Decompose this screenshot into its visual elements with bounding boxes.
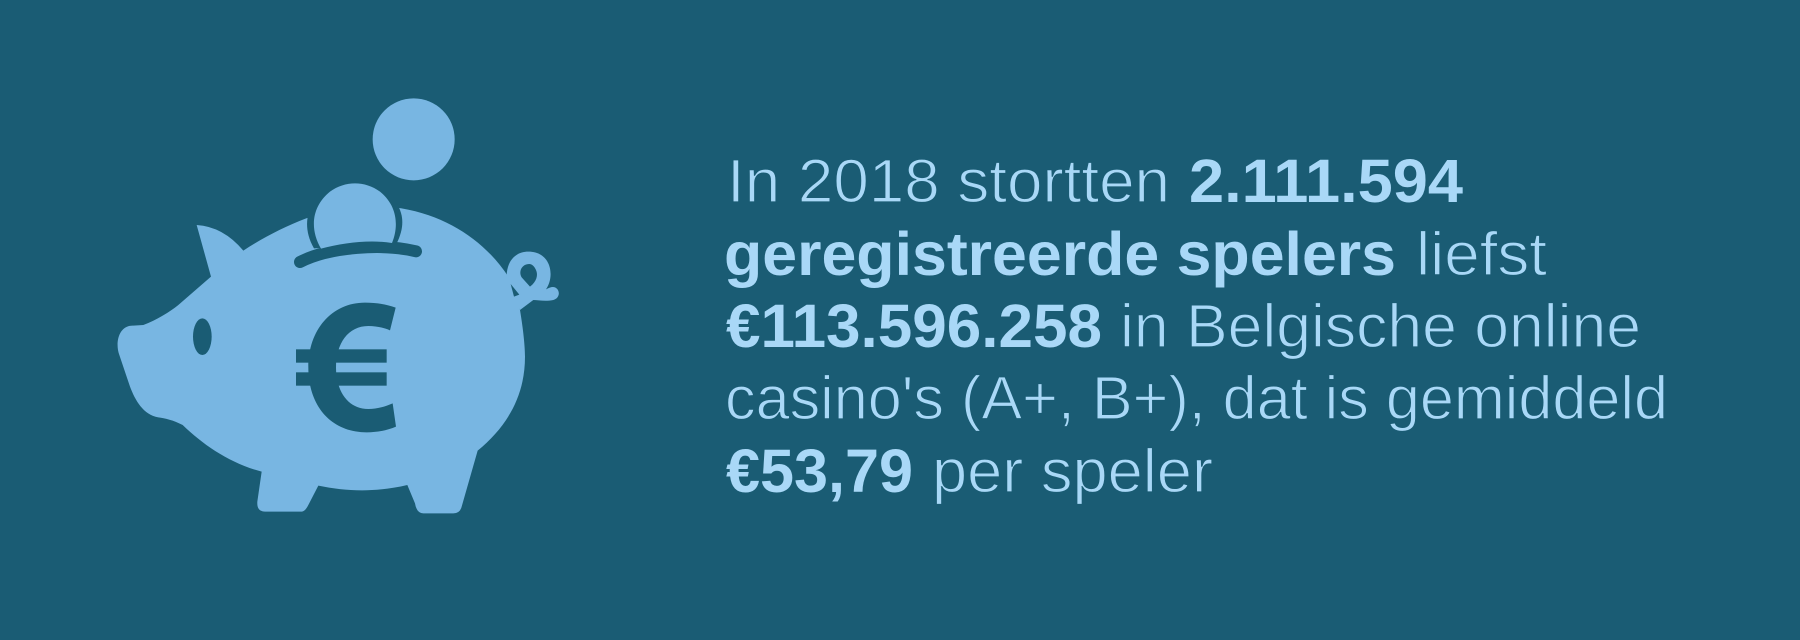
icon: pig body	[118, 206, 525, 513]
line 1: 2.111.594	[1189, 147, 1463, 215]
line 5: per speler	[932, 437, 1213, 505]
text block: statistics	[724, 147, 1668, 505]
line 2: geregistreerde spelers	[724, 220, 1396, 288]
line 4: casino's (A+, B+), dat is gemiddeld	[725, 364, 1668, 432]
icon: euro sign	[296, 303, 396, 432]
line 1: In 2018 stortten	[727, 147, 1170, 215]
line 3	[726, 292, 1641, 360]
line 2: liefst	[1416, 220, 1547, 288]
line 3: in Belgische online	[1120, 292, 1641, 360]
icon: piggy bank with coins	[118, 98, 559, 513]
icon: pig eye	[193, 318, 212, 355]
line 1	[727, 147, 1463, 215]
icon: tail hole	[511, 264, 537, 297]
icon: coin slot	[300, 247, 416, 262]
icon: coin ring	[307, 203, 402, 248]
line 3: €113.596.258	[726, 292, 1102, 360]
line 5: €53,79	[726, 437, 913, 505]
icon: falling coin	[373, 98, 455, 180]
line 5	[726, 437, 1213, 505]
icon: coin entering slot	[314, 183, 396, 249]
icon: pig tail	[507, 252, 559, 310]
